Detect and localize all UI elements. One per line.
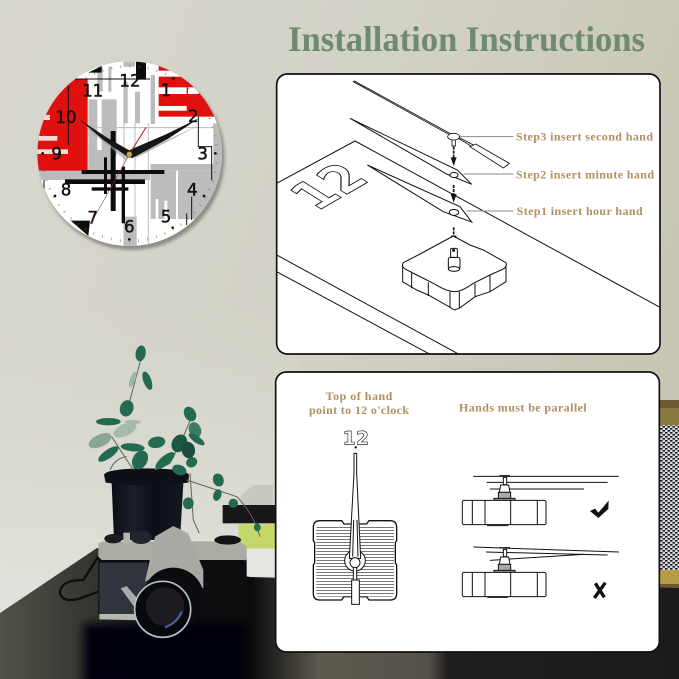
thin black lines [44,79,212,225]
clock movement [402,236,506,310]
minute ticks [42,66,217,241]
camera reflection [83,623,247,679]
front view movement [313,446,397,604]
photo: plant and camera [60,345,277,679]
clock numerals: 9 [51,145,62,164]
heading: parallel: Hands must be parallel [459,401,587,415]
plant stems [110,360,260,537]
vertical hand [345,453,365,604]
title: Installation Instructions [288,19,645,59]
clock numerals: 7 [87,208,98,227]
hour hand [367,165,472,222]
panel background [277,74,660,354]
red blocks [33,66,219,171]
speaker at right edge [655,400,679,600]
panel: alignment rules [276,372,659,652]
leader lines [460,137,513,211]
gray blocks [33,62,225,250]
clock face [33,57,227,253]
clock hands [79,118,202,223]
camera strap [60,557,98,600]
clock numerals: 10 [55,108,77,127]
clock numerals: 12 [119,72,141,91]
black blocks [65,61,164,236]
clock numerals [51,72,208,237]
gray thin lines [88,123,217,247]
clock numerals: 6 [124,218,135,237]
step labels: Step2 insert minute hand [516,168,654,182]
minute hand [350,118,472,184]
outlined numeral 12: 12 [277,155,382,218]
clock shadow [39,65,225,250]
plant pot [104,468,189,540]
clock numerals: 3 [197,145,208,164]
heading: top of hand: point to 12 o'clock [309,403,409,417]
second hand [353,81,509,168]
table [0,548,679,679]
clock numerals: 4 [187,181,198,200]
icon: check mark [590,501,609,518]
step labels [516,130,654,218]
clock numerals: 8 [61,180,71,199]
dial edge lines [277,141,660,354]
plant leaves [86,345,261,531]
panel: assembly steps [277,74,660,354]
pale stripes [37,115,68,154]
assembly arrows [451,147,457,244]
icon: cross mark [594,583,605,598]
clock numerals: 11 [82,82,103,101]
books behind camera [223,485,277,576]
step labels: Step1 insert hour hand [517,204,643,218]
panel background [276,372,659,652]
clock numerals: 2 [188,107,199,126]
non-parallel hands diagram [462,547,619,597]
heading: top of hand: Top of hand [326,389,393,403]
clock numerals: 5 [161,208,171,227]
heading: top of hand [309,389,409,417]
tip dot [354,446,357,448]
parallel hands diagram [462,476,619,526]
wall clock [33,57,227,253]
camera [98,526,247,637]
hour dots [41,77,217,241]
outlined numeral 12: 12 [343,428,369,449]
clock numerals: 1 [161,81,171,100]
step labels: Step3 insert second hand [516,130,653,144]
